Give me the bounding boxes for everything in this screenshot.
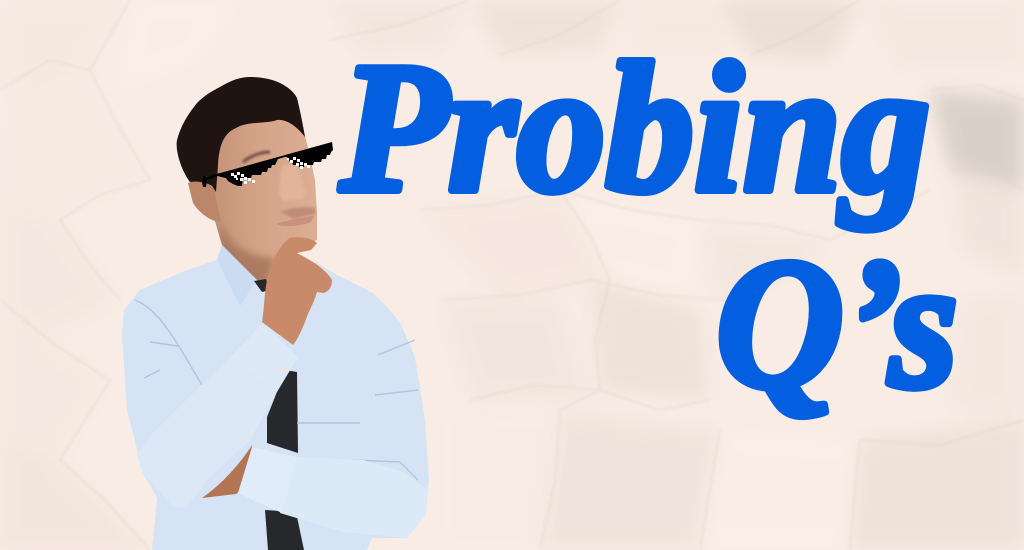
- folded left arm: [137, 357, 277, 508]
- man with sunglasses: [122, 77, 429, 550]
- title: Probing: Probing: [339, 25, 930, 231]
- sunglasses: [202, 142, 333, 187]
- neck and head: [188, 120, 317, 282]
- shirt: [122, 245, 429, 550]
- hand on chin: [262, 237, 332, 345]
- cuff buttons: [281, 367, 287, 373]
- crossed right arm: [280, 457, 428, 538]
- tie: [254, 279, 304, 550]
- sleeve cuff: [230, 323, 298, 392]
- title: Q's: Q’s: [716, 221, 958, 427]
- fold lines: [135, 300, 418, 480]
- right cuff: [238, 447, 297, 513]
- forearm skin: [202, 445, 252, 498]
- lens glints: [231, 157, 310, 184]
- collar: [217, 245, 256, 306]
- hair: [177, 77, 305, 192]
